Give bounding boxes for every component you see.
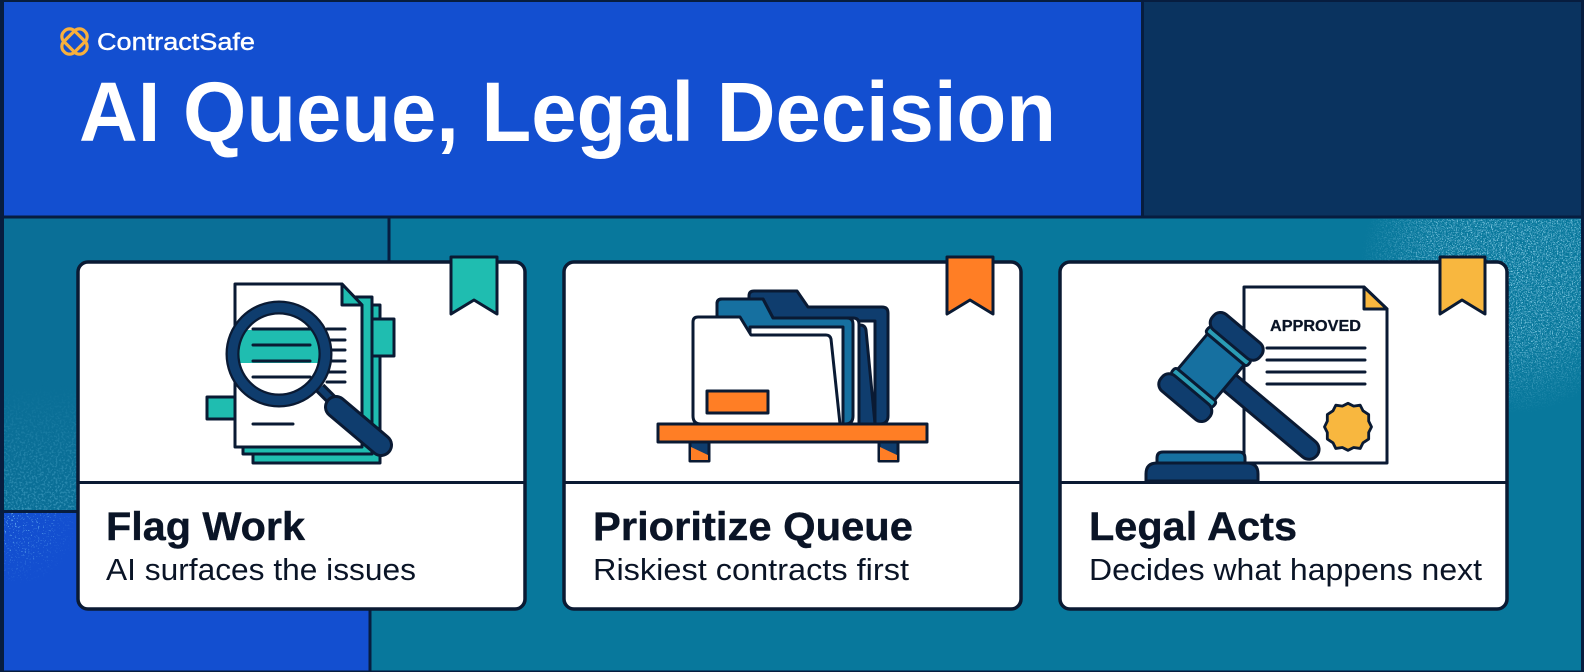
icon: document with magnifying glass <box>207 284 394 463</box>
icon: yellow bookmark <box>1440 257 1485 314</box>
icon: folders on shelf <box>658 291 927 461</box>
logo: ContractSafe <box>59 26 255 57</box>
icon: teal bookmark <box>451 257 497 314</box>
panel: Legal Acts card <box>1060 257 1507 609</box>
panel: Flag Work card <box>78 257 525 609</box>
description: Decides what happens next <box>1089 552 1482 587</box>
icon: gavel and approved certificate <box>1146 287 1387 488</box>
logo: ContractSafe: ContractSafe <box>97 29 255 56</box>
title: AI Queue, Legal Decision <box>79 65 1056 159</box>
description: Riskiest contracts first <box>593 552 909 587</box>
icon: gavel and approved certificate: APPROVED <box>1270 318 1361 335</box>
heading: Flag Work <box>106 505 306 549</box>
heading: Prioritize Queue <box>593 505 913 549</box>
panel: Prioritize Queue card <box>564 257 1021 609</box>
description: AI surfaces the issues <box>106 552 416 587</box>
icon: logo mark <box>59 26 90 57</box>
icon: orange bookmark <box>947 257 993 314</box>
heading: Legal Acts <box>1089 505 1297 549</box>
